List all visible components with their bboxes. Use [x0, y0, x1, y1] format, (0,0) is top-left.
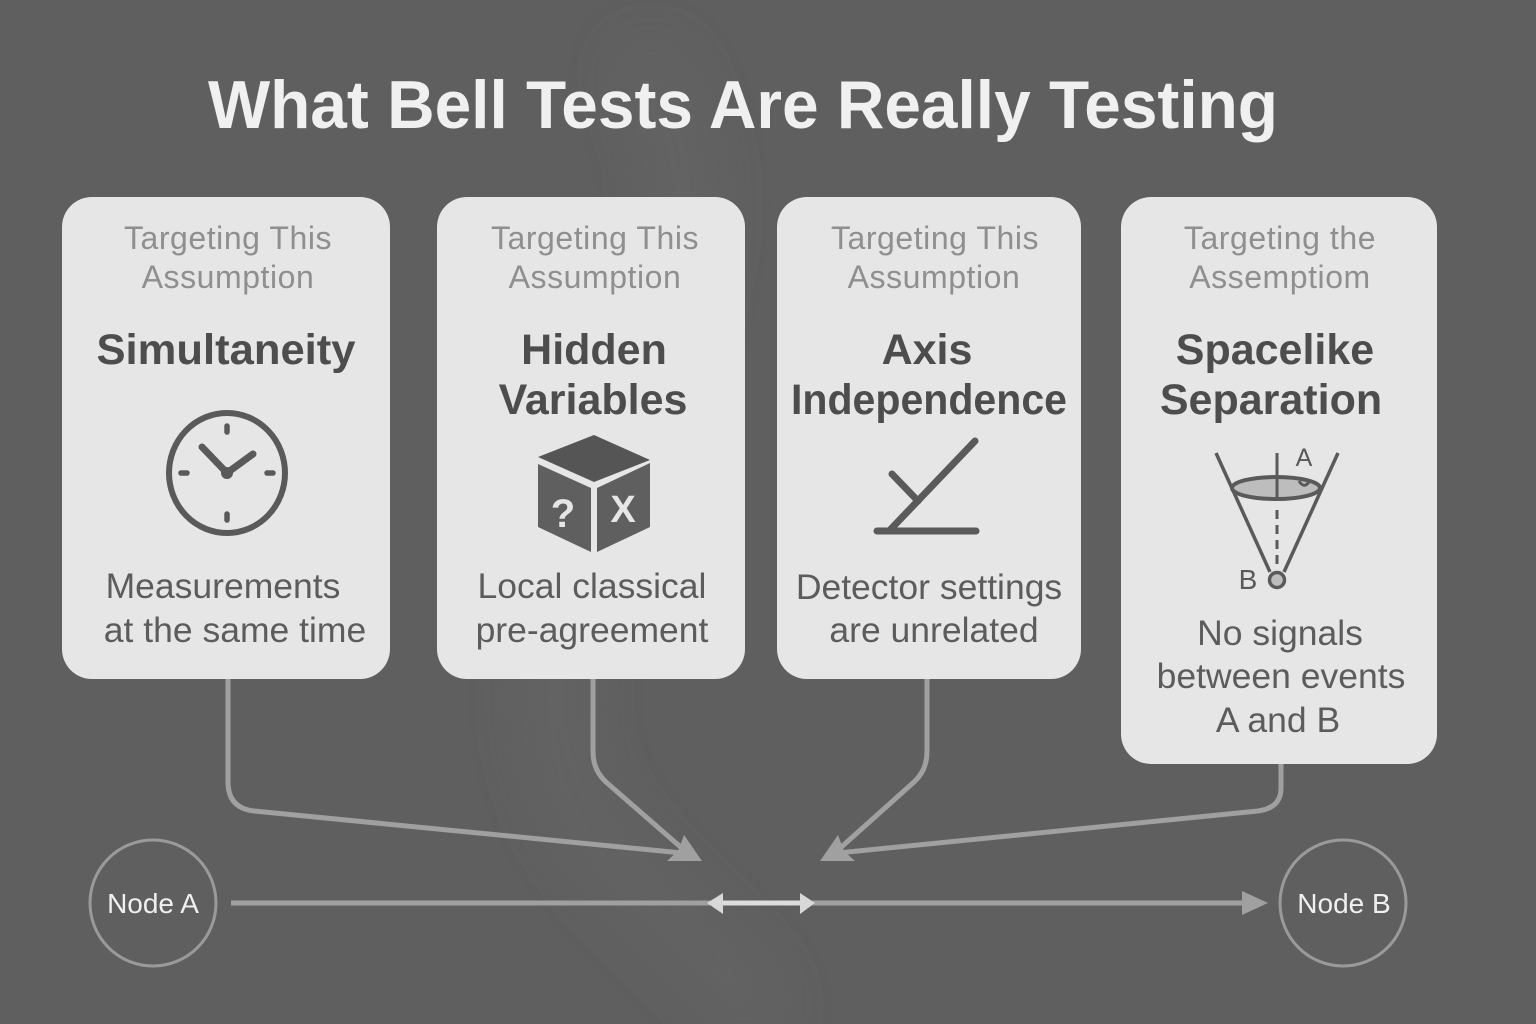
icon: clock: [169, 413, 285, 533]
panel label: spacelike separation: Targeting the: [1184, 220, 1376, 256]
icon: mystery box: [538, 435, 650, 552]
title: What Bell Tests Are Really Testing: [208, 67, 1278, 143]
icon: light cone: B: [1239, 564, 1257, 595]
panel: hidden variables: [437, 197, 745, 679]
panel label: spacelike separation: Assemptiom: [1189, 259, 1371, 295]
heading: simultaneity: Simultaneity: [96, 326, 356, 374]
node A: [90, 840, 216, 966]
description: axis independence: are unrelated: [829, 610, 1039, 650]
panel label: simultaneity: Targeting This: [124, 220, 332, 256]
timeline arrow: [231, 891, 1268, 915]
icon: light cone: A: [1296, 444, 1313, 472]
connector: hidden variables to centre: [593, 678, 684, 850]
icon: angle axes: [877, 441, 976, 531]
arrowhead: left convergence: [667, 835, 702, 861]
heading: hidden variables: Hidden: [521, 326, 667, 374]
icon: mystery box: X: [610, 489, 636, 531]
panel label: hidden variables: Assumption: [509, 259, 681, 295]
description: spacelike separation: No signals: [1197, 613, 1363, 653]
node A: Node A: [107, 888, 199, 919]
panel: spacelike separation: [1121, 197, 1437, 764]
description: spacelike separation: between events: [1157, 656, 1405, 696]
panel label: axis independence: Assumption: [848, 259, 1020, 295]
node B: Node B: [1297, 888, 1391, 919]
panel label: axis independence: Targeting This: [831, 220, 1039, 256]
description: axis independence: Detector settings: [796, 567, 1062, 607]
panel label: simultaneity: Assumption: [142, 259, 314, 295]
description: hidden variables: Local classical: [478, 566, 706, 606]
heading: hidden variables: Variables: [499, 376, 687, 424]
description: simultaneity: at the same time: [104, 610, 366, 650]
connector: simultaneity to centre: [228, 678, 682, 853]
icon: mystery box: ?: [551, 492, 575, 536]
description: simultaneity: Measurements: [106, 566, 340, 606]
heading: spacelike separation: Separation: [1160, 376, 1382, 424]
description: spacelike separation: A and B: [1216, 700, 1340, 740]
connector: spacelike separation to centre: [838, 763, 1281, 853]
heading: axis independence: Axis: [882, 326, 972, 374]
heading: spacelike separation: Spacelike: [1176, 326, 1374, 374]
heading: axis independence: Independence: [791, 376, 1067, 424]
panel: axis independence: [777, 197, 1081, 679]
connector: axis independence to centre: [838, 678, 927, 850]
arrowhead: right convergence: [820, 835, 855, 861]
icon: light cone: [1216, 444, 1338, 595]
panel: simultaneity: [62, 197, 390, 679]
panel label: hidden variables: Targeting This: [491, 220, 699, 256]
node B: [1280, 840, 1406, 966]
description: hidden variables: pre-agreement: [476, 610, 709, 650]
